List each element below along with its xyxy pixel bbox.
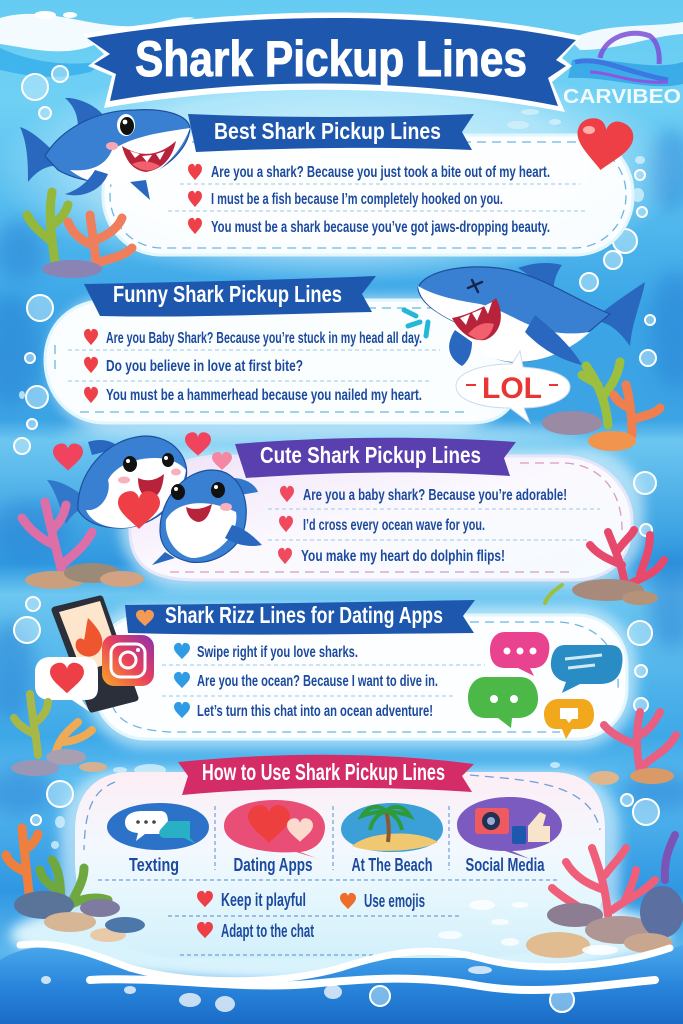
ribbon: how to use shark pickup lines bbox=[178, 755, 474, 795]
ribbon: best shark pickup lines: Best Shark Pickup Lines bbox=[214, 118, 441, 144]
list text: Are you the ocean? Because I want to dive in. bbox=[197, 673, 438, 690]
ribbon: funny shark pickup lines bbox=[84, 276, 376, 317]
list text: Let’s turn this chat into an ocean adventure! bbox=[197, 703, 433, 720]
coral and rocks: left of rizz panel bbox=[11, 694, 107, 776]
tips: Use emojis bbox=[364, 891, 425, 911]
coral and rocks: right of cute panel bbox=[545, 530, 664, 605]
title banner bbox=[82, 12, 582, 112]
baby sharks with heart bbox=[47, 432, 262, 565]
divider lines bbox=[168, 184, 585, 211]
category: dating apps bbox=[224, 800, 325, 875]
ribbon: how to use shark pickup lines: How to Use Shark Pickup Lines bbox=[202, 759, 445, 785]
category: at the beach: At The Beach bbox=[352, 855, 432, 875]
title text: Shark Pickup Lines bbox=[135, 31, 527, 87]
list text: You must be a shark because you’ve got jaws-dropping beauty. bbox=[211, 219, 550, 236]
heart bullets bbox=[278, 486, 294, 564]
category: dating apps: Dating Apps bbox=[234, 855, 312, 875]
tips bbox=[197, 890, 425, 941]
yellow bubble bbox=[544, 699, 594, 739]
waves and deep water bbox=[10, 887, 670, 983]
separators bbox=[98, 806, 560, 955]
list text bbox=[211, 164, 550, 236]
panel: how to use shark pickup lines bbox=[75, 772, 605, 958]
panel: cute shark pickup lines bbox=[130, 456, 632, 580]
list text: I’d cross every ocean wave for you. bbox=[303, 517, 485, 534]
list text: Swipe right if you love sharks. bbox=[197, 644, 358, 661]
tips: Adapt to the chat bbox=[221, 921, 314, 941]
ribbon: cute shark pickup lines: Cute Shark Pickup Lines bbox=[260, 442, 481, 468]
tips: Keep it playful bbox=[221, 890, 306, 910]
panel: funny shark pickup lines bbox=[45, 300, 520, 423]
coral and rocks: left of cute panel bbox=[22, 502, 144, 589]
category: social media bbox=[457, 797, 562, 875]
speech bubble: LOL: LOL bbox=[482, 372, 542, 405]
heart bullets bbox=[188, 164, 202, 234]
ribbon: shark rizz lines bbox=[125, 600, 475, 635]
water specks bbox=[19, 109, 645, 849]
category: texting: Texting bbox=[129, 855, 179, 875]
icon: phone, instagram and heart bubble bbox=[35, 599, 154, 712]
coral and rocks: bottom right bbox=[526, 835, 683, 958]
splash lines bbox=[404, 310, 428, 336]
soft light halos around panels bbox=[50, 296, 644, 965]
list text: Are you a shark? Because you just took a bite out of my heart. bbox=[211, 164, 550, 181]
list text bbox=[197, 644, 438, 720]
pink bubble bbox=[490, 632, 549, 676]
logo: CARVIBEO bbox=[563, 33, 681, 108]
divider lines bbox=[68, 350, 440, 381]
list text: You must be a hammerhead because you nailed my heart. bbox=[106, 387, 422, 404]
category: at the beach bbox=[341, 803, 443, 875]
list text: Are you Baby Shark? Because you’re stuck in my head all day. bbox=[106, 330, 422, 347]
shark: smiling blue shark bbox=[20, 98, 190, 200]
category: social media: Social Media bbox=[466, 855, 545, 875]
list text bbox=[301, 487, 567, 565]
list text: You make my heart do dolphin flips! bbox=[301, 548, 505, 565]
panel: shark rizz lines for dating apps bbox=[95, 615, 627, 739]
heart bullets bbox=[84, 329, 98, 403]
ribbon: shark rizz lines: Shark Rizz Lines for Dating Apps bbox=[165, 602, 443, 628]
green bubble bbox=[468, 677, 538, 728]
list text: Are you a baby shark? Because you’re adorable! bbox=[303, 487, 567, 504]
list text: I must be a fish because I’m completely hooked on you. bbox=[211, 191, 503, 208]
coral and rocks: right of rizz panel bbox=[589, 712, 676, 785]
panel: best shark pickup lines bbox=[27, 116, 635, 278]
top waves bbox=[0, 14, 195, 51]
heart bullets bbox=[174, 643, 190, 718]
logo: CARVIBEO: CARVIBEO bbox=[563, 86, 681, 108]
ribbon: cute shark pickup lines bbox=[235, 438, 516, 478]
divider lines bbox=[268, 509, 600, 540]
list text bbox=[106, 330, 422, 404]
divider lines bbox=[162, 665, 485, 696]
icon: hearts bbox=[53, 432, 232, 529]
speech bubble: LOL bbox=[456, 351, 570, 423]
water waves foreground bbox=[20, 944, 670, 1012]
list text: Do you believe in love at first bite? bbox=[106, 358, 303, 375]
coral left bbox=[27, 192, 132, 278]
coral and rocks: bottom left bbox=[6, 828, 145, 942]
ribbon: funny shark pickup lines: Funny Shark Pickup Lines bbox=[113, 281, 342, 307]
blue bubble bbox=[551, 645, 622, 693]
ribbon: best shark pickup lines bbox=[188, 114, 474, 152]
category: texting bbox=[107, 803, 209, 875]
shark: laughing shark bbox=[404, 263, 645, 366]
icon: chat bubbles bbox=[468, 632, 622, 739]
icon: big heart bbox=[573, 116, 635, 174]
coral and rocks: right of funny panel bbox=[542, 362, 660, 451]
water specks on the panel bbox=[438, 900, 528, 946]
